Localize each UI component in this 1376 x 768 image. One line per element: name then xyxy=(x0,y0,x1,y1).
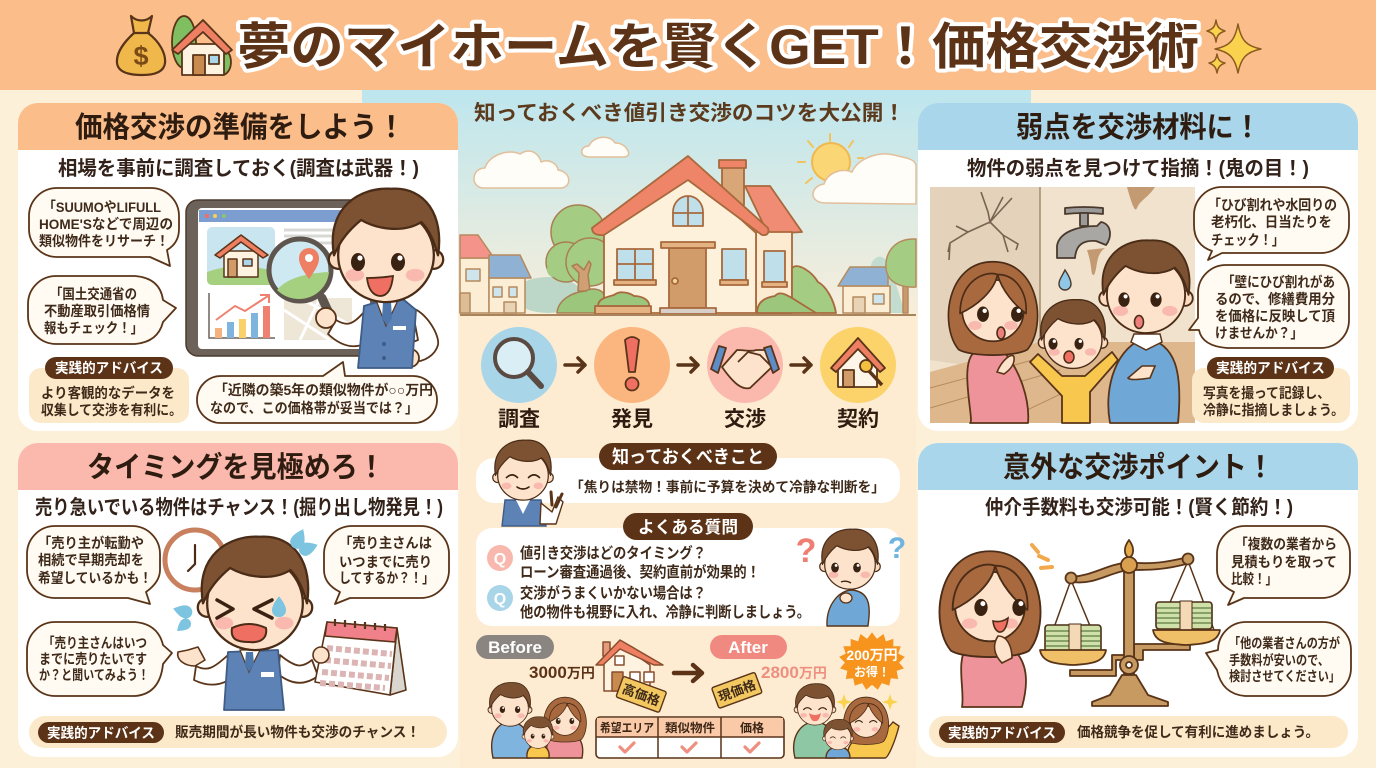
main title text: 夢のマイホームを賢くGET！価格交渉術 xyxy=(237,19,1199,75)
bubble: nearby price: 「近隣の築5年の類似物件が○○万円 xyxy=(214,382,433,398)
step: discovery xyxy=(594,327,670,431)
question one: 値引き交渉はどのタイミング？ xyxy=(520,544,706,562)
section label xyxy=(623,513,753,540)
panel header xyxy=(918,443,1358,490)
bubble: nearby price: なので、この価格帯が妥当では？」 xyxy=(210,400,418,416)
icon: money bag xyxy=(117,16,165,75)
step: negotiation xyxy=(707,327,783,431)
bubble: request discount: けませんか？」 xyxy=(1215,325,1303,341)
subheading: 相場を事前に調査しておく(調査は武器！) xyxy=(58,157,419,180)
tablet illustration xyxy=(186,200,376,356)
section: faq xyxy=(476,513,906,626)
section label: 知っておくべきこと xyxy=(612,447,764,467)
smiling agent with peace sign xyxy=(493,440,563,526)
before label: Before xyxy=(488,638,542,657)
step: contract xyxy=(820,327,896,431)
panel header xyxy=(918,103,1358,150)
bubble: request discount xyxy=(1189,265,1349,348)
icon: sparkles xyxy=(1207,20,1261,73)
bubble: lower fee xyxy=(1206,622,1351,696)
savings badge xyxy=(839,632,905,690)
bubble: check cracks: 老朽化、日当たりを xyxy=(1211,214,1332,230)
bubble: ask seller: いつまでに売り xyxy=(339,554,432,570)
subheading: 売り急いでいる物件はチャンス！(掘り出し物発見！) xyxy=(35,496,443,519)
bubble: research sites xyxy=(29,188,179,266)
bubble: seller situation: 相続で早期売却を xyxy=(38,552,144,568)
icon: magnifier xyxy=(269,239,335,326)
bubble: get quotes: 「複数の業者から xyxy=(1235,536,1337,552)
section: what to know xyxy=(476,440,900,526)
bubble: seller situation: 「売り主が転勤や xyxy=(38,535,144,551)
heading: 価格交渉の準備をしよう！ xyxy=(75,111,405,144)
advice box: 実践的アドバイス xyxy=(1216,360,1325,376)
bubble: research sites: 類似物件をリサーチ！ xyxy=(39,233,169,249)
bubble: ask deadline: 「売り主さんはいつ xyxy=(43,635,147,651)
background houses and trees xyxy=(460,235,916,313)
cloud right xyxy=(813,154,916,204)
subheading: 物件の弱点を見つけて指摘！(鬼の目！) xyxy=(967,156,1309,180)
ground line xyxy=(460,314,916,316)
panel: timing xyxy=(18,443,458,757)
main house xyxy=(592,156,836,314)
thinking man: ? xyxy=(888,532,906,565)
subtitle: 知っておくべき値引き交渉のコツを大公開！ xyxy=(474,102,905,125)
step: research xyxy=(481,327,557,431)
sweat drops xyxy=(172,526,320,635)
bubble: request discount: 「壁にひび割れがあ xyxy=(1222,274,1335,290)
worried businessman xyxy=(178,537,318,710)
checklist table: 希望エリア xyxy=(600,720,654,735)
advice box: 実践的アドバイス xyxy=(55,360,163,376)
arrow xyxy=(565,358,585,372)
father xyxy=(1099,240,1193,423)
question one: ローン審査通過後、契約直前が効果的！ xyxy=(520,563,760,581)
bubble: check cracks: 「ひび割れや水回りの xyxy=(1208,197,1337,213)
after label xyxy=(710,635,787,659)
bubble: ask deadline: までに売りたいです xyxy=(39,651,147,667)
arrow xyxy=(678,358,698,372)
icon: house with tree xyxy=(172,16,232,75)
bubble: research sites: HOME'Sなどで周辺の xyxy=(39,216,173,232)
heading: タイミングを見極めろ！ xyxy=(87,451,385,484)
bubble: nearby price xyxy=(197,362,437,423)
icon: clock xyxy=(165,530,225,590)
left tree xyxy=(546,205,614,313)
bubble: check cracks xyxy=(1194,187,1349,260)
advice bar xyxy=(929,716,1348,748)
clouds xyxy=(474,137,629,188)
bubble: check cracks: チェック！」 xyxy=(1211,232,1284,248)
after label: After xyxy=(728,638,768,657)
bubble: research sites: 「SUUMOやLIFULL xyxy=(43,199,161,215)
bubble: ask deadline: か？と聞いてみよう！ xyxy=(39,667,149,683)
advice box: より客観的なデータを xyxy=(41,385,175,401)
bubble: ask seller: 「売り主さんは xyxy=(339,535,432,551)
panel: weak points xyxy=(918,103,1358,431)
step: negotiation: 交渉 xyxy=(724,408,766,431)
advice box: 収集して交渉を有利に。 xyxy=(41,402,182,418)
bubble: ask seller: してするか？！」 xyxy=(339,570,434,586)
advice box: 冷静に指摘しましょう。 xyxy=(1203,402,1344,418)
before price: 3000万円 xyxy=(529,663,595,682)
panel header xyxy=(18,103,458,150)
advice box xyxy=(1192,357,1350,423)
arrow xyxy=(674,665,702,681)
bubble: ask deadline xyxy=(27,622,172,696)
bubble: ministry data: 「国土交通省の xyxy=(50,286,137,302)
bubble: seller situation xyxy=(27,526,160,604)
question one xyxy=(487,544,760,581)
child xyxy=(1030,300,1118,423)
heading: 弱点を交渉材料に！ xyxy=(1016,111,1261,144)
step: discovery: 発見 xyxy=(611,408,653,431)
bubble: get quotes: 見積もりを取って xyxy=(1231,554,1337,570)
question two: Q xyxy=(494,591,506,608)
heading: 意外な交渉ポイント！ xyxy=(1003,451,1274,484)
before and after comparison xyxy=(476,632,905,758)
bubble: ministry data: 報もチェック！」 xyxy=(44,320,143,336)
section label xyxy=(599,443,777,470)
savings badge: お得！ xyxy=(854,664,890,679)
thinking man xyxy=(796,529,906,626)
step: contract: 契約 xyxy=(837,408,879,431)
step: research: 調査 xyxy=(498,408,540,431)
discounted price tag: 現価格 xyxy=(716,677,758,705)
center hero scene xyxy=(362,90,1031,768)
bubble: ministry data: 不動産取引価格情 xyxy=(44,303,150,319)
advice bar: 実践的アドバイス xyxy=(948,725,1056,741)
question two: 交渉がうまくいかない場合は？ xyxy=(520,584,706,602)
icon: money bag: $ xyxy=(133,41,149,71)
advice bar: 販売期間が長い物件も交渉のチャンス！ xyxy=(175,724,420,740)
bubble: get quotes: 比較！」 xyxy=(1231,571,1277,587)
checklist table xyxy=(596,717,784,758)
bubble: ministry data xyxy=(28,276,176,344)
bubble: ask seller xyxy=(324,526,449,604)
panel header xyxy=(18,443,458,490)
sun xyxy=(798,134,863,183)
advice box: 写真を撮って記録し、 xyxy=(1203,385,1330,401)
mother xyxy=(948,262,1038,423)
house with tag: 高価格 xyxy=(620,681,662,709)
discounted price tag xyxy=(712,672,762,709)
advice box xyxy=(29,357,189,423)
question two xyxy=(487,584,810,621)
section label: よくある質問 xyxy=(638,518,738,537)
bubble: get quotes xyxy=(1217,526,1350,605)
panel: preparation xyxy=(18,103,458,431)
advice bar: 価格競争を促して有利に進めましょう。 xyxy=(1077,724,1319,740)
house with tag xyxy=(596,640,667,713)
family before xyxy=(488,683,586,758)
checklist table: 類似物件 xyxy=(665,720,715,735)
question two: 他の物件も視野に入れ、冷静に判断しましょう。 xyxy=(520,603,810,621)
title banner xyxy=(0,0,1376,90)
panel: surprising points xyxy=(918,443,1358,757)
family inspecting damage illustration xyxy=(930,187,1195,423)
thinking man: ? xyxy=(796,532,816,570)
woman praying xyxy=(940,545,1052,707)
bubble: seller situation: 希望しているかも！ xyxy=(38,570,152,586)
family after xyxy=(794,684,899,758)
checklist table: 価格 xyxy=(740,720,764,735)
bubble: lower fee: 手数料が安いので、 xyxy=(1229,652,1329,668)
subheading: 仲介手数料も交渉可能！(賢く節約！) xyxy=(985,496,1293,519)
process steps xyxy=(481,327,896,431)
before label xyxy=(476,635,554,659)
question one: Q xyxy=(494,551,506,568)
water stain xyxy=(1127,187,1155,209)
balance scale xyxy=(1040,540,1220,706)
advice bar xyxy=(29,716,447,748)
businessman with magnifier xyxy=(316,189,443,368)
bubble: request discount: を価格に反映して頂 xyxy=(1215,308,1335,324)
advice bar: 実践的アドバイス xyxy=(47,725,155,741)
after price: 2800万円 xyxy=(761,663,827,682)
bubble: request discount: るので、修繕費用分 xyxy=(1215,291,1335,307)
bubble: lower fee: 検討させてください」 xyxy=(1229,668,1340,684)
arrow xyxy=(791,358,811,372)
faucet xyxy=(1057,207,1110,258)
savings badge: 200万円 xyxy=(846,647,898,663)
bubble: lower fee: 「他の業者さんの方が xyxy=(1229,635,1340,651)
advice quote: 「焦りは禁物！事前に予算を決めて冷静な判断を」 xyxy=(570,479,885,495)
icon: calendar xyxy=(315,619,406,695)
crack xyxy=(948,192,1018,260)
